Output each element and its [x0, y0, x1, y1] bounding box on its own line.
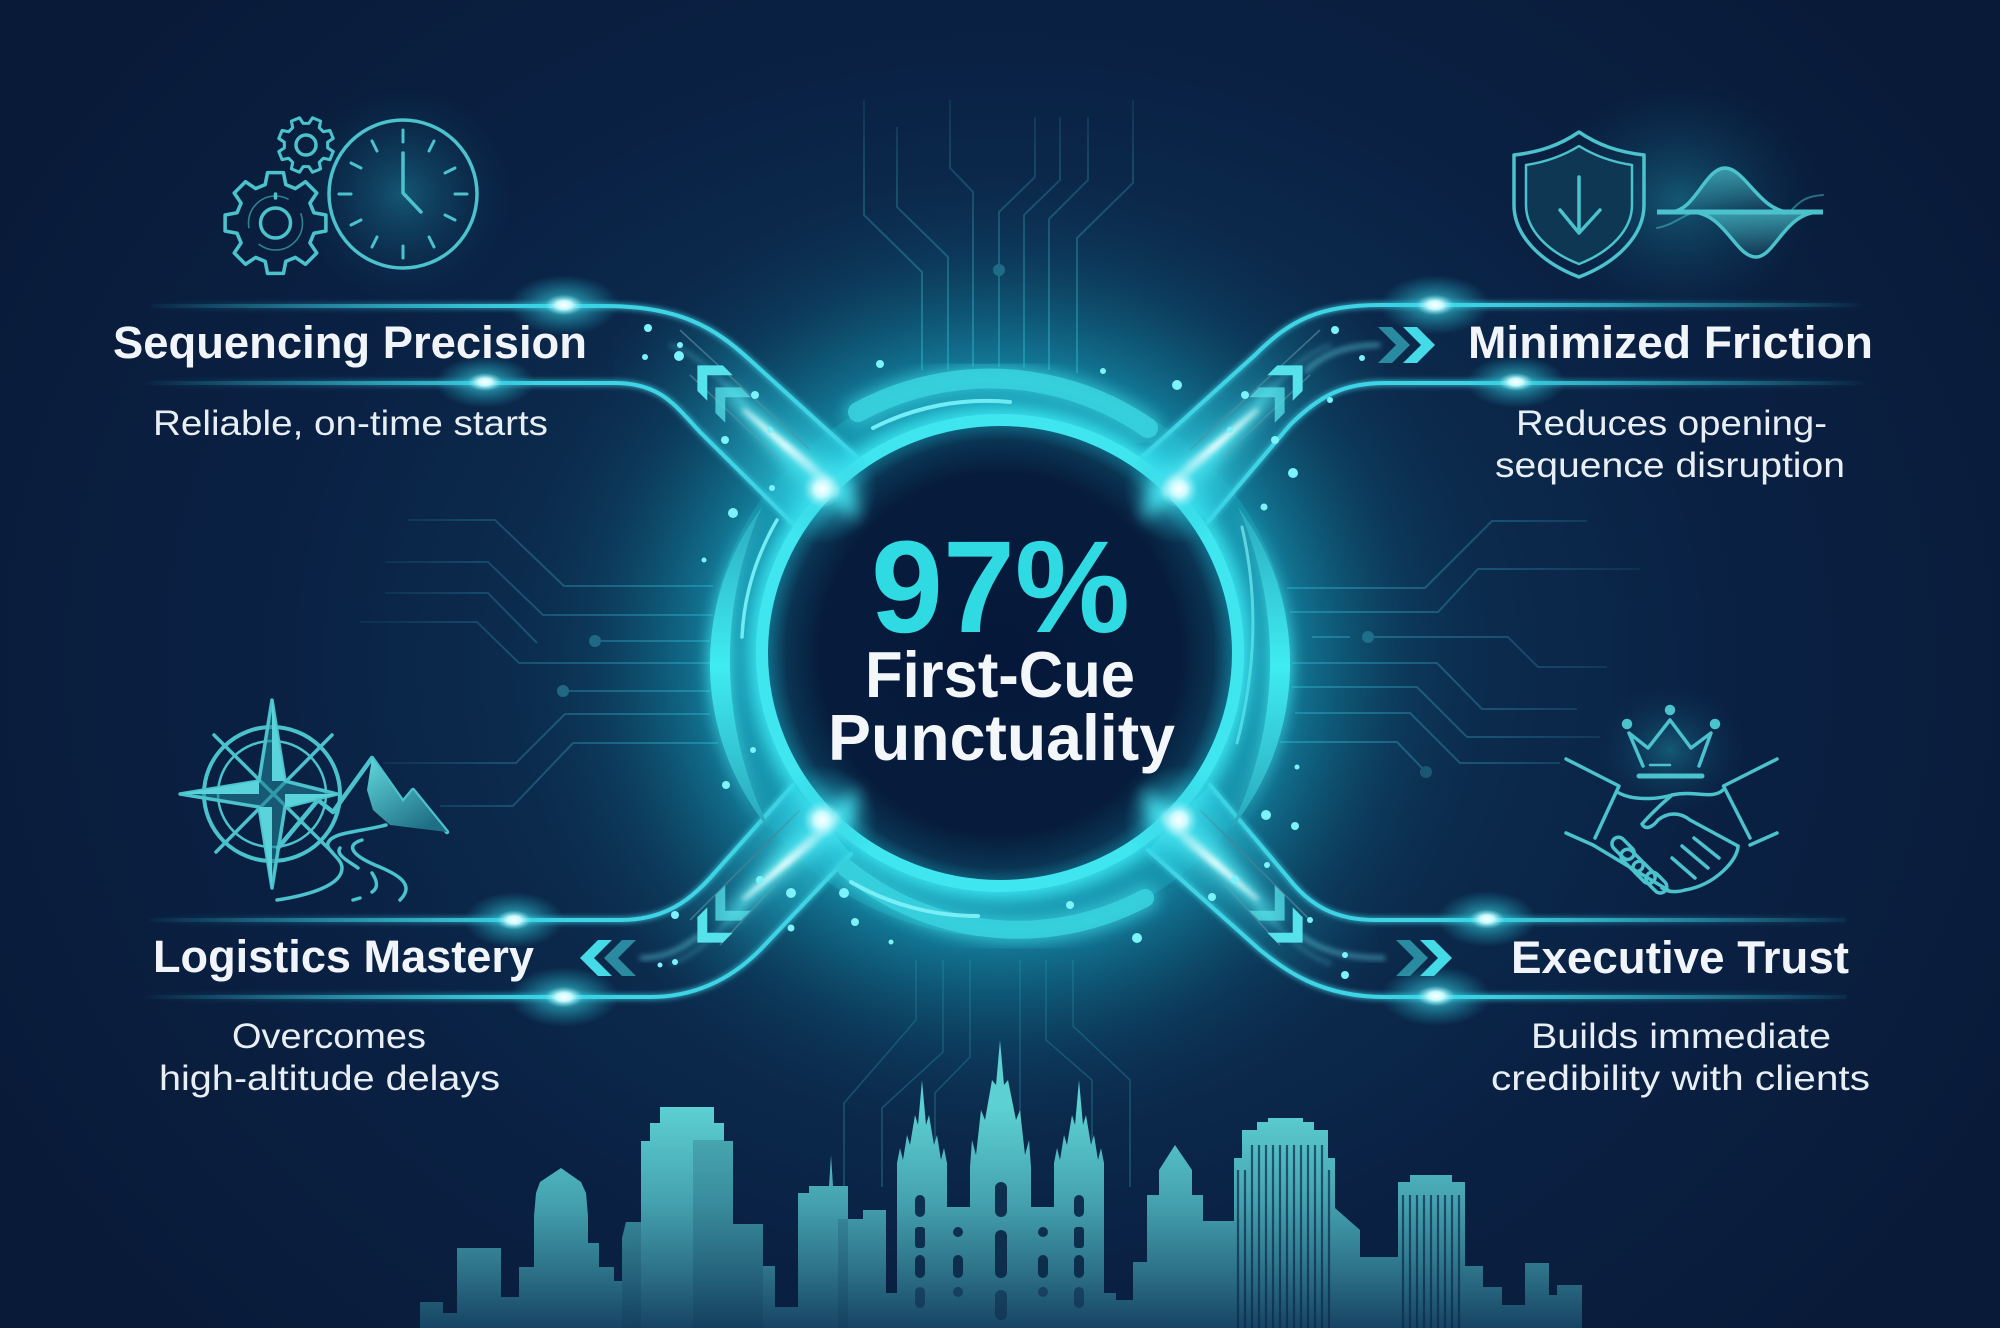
arrow: chevrons upper right horizontal [1378, 327, 1435, 363]
heading: Sequencing Precision: Sequencing Precision [113, 317, 587, 368]
arrow: chevrons upper right diagonal [1249, 353, 1315, 423]
heading: Logistics Mastery: Logistics Mastery [153, 931, 534, 982]
text: Minimized Friction detail [1495, 404, 1845, 485]
main glowing ring [762, 420, 1238, 886]
arrow: chevrons upper left [685, 353, 751, 423]
arrow: chevrons lower right horizontal [1396, 940, 1452, 976]
icon: gears and clock [225, 84, 513, 304]
junction flares [670, 345, 1331, 964]
skyline windows and stripes [915, 1182, 1084, 1320]
text: Executive Trust detail: Builds immediate [1531, 1017, 1831, 1056]
outer ring arcs [710, 379, 1290, 930]
text: Logistics Mastery detail [159, 1017, 500, 1098]
text: Logistics Mastery detail: Overcomes [232, 1017, 426, 1056]
ring gap fill [736, 402, 1264, 912]
icon: shield and wave [1514, 80, 1823, 320]
circuit lines right [1280, 521, 1640, 778]
circuit lines left [360, 520, 718, 806]
arrow: chevrons lower right diagonal [1249, 885, 1315, 955]
circuit lines bottom [844, 960, 1130, 1200]
metric value: 97% [871, 513, 1130, 660]
icon: compass, mountain and road [180, 700, 447, 900]
panel: flow band upper left [138, 275, 858, 526]
circuit lines top [864, 100, 1133, 373]
heading: Executive Trust: Executive Trust [1511, 932, 1849, 983]
arrow: chevrons lower left horizontal [580, 940, 636, 976]
sparkle particles [642, 324, 1365, 979]
central circle with metric [762, 420, 1238, 886]
text: Minimized Friction detail: sequence disruption [1495, 446, 1845, 485]
text: Logistics Mastery detail: high-altitude delays [159, 1059, 500, 1098]
text: Executive Trust detail [1491, 1017, 1870, 1098]
metric label: Punctuality [828, 701, 1175, 774]
arrow: chevrons lower left diagonal [685, 885, 751, 955]
panel: flow band upper right [1141, 275, 1868, 522]
ring halo glow [500, 154, 1500, 1154]
panel: flow band lower right [1148, 785, 1845, 1026]
panel: flow band lower left [148, 785, 851, 1027]
text: Sequencing Precision detail: Reliable, on-time starts [153, 404, 548, 443]
metric label: First-Cue [865, 638, 1135, 711]
text: Minimized Friction detail: Reduces opening- [1516, 404, 1827, 443]
icon: crown and handshake [1566, 685, 1777, 896]
text: Executive Trust detail: credibility with clients [1491, 1059, 1870, 1098]
skyline facets [622, 1140, 848, 1328]
heading: Minimized Friction: Minimized Friction [1468, 317, 1873, 368]
metric label [828, 638, 1175, 774]
skyline [420, 1040, 1582, 1328]
